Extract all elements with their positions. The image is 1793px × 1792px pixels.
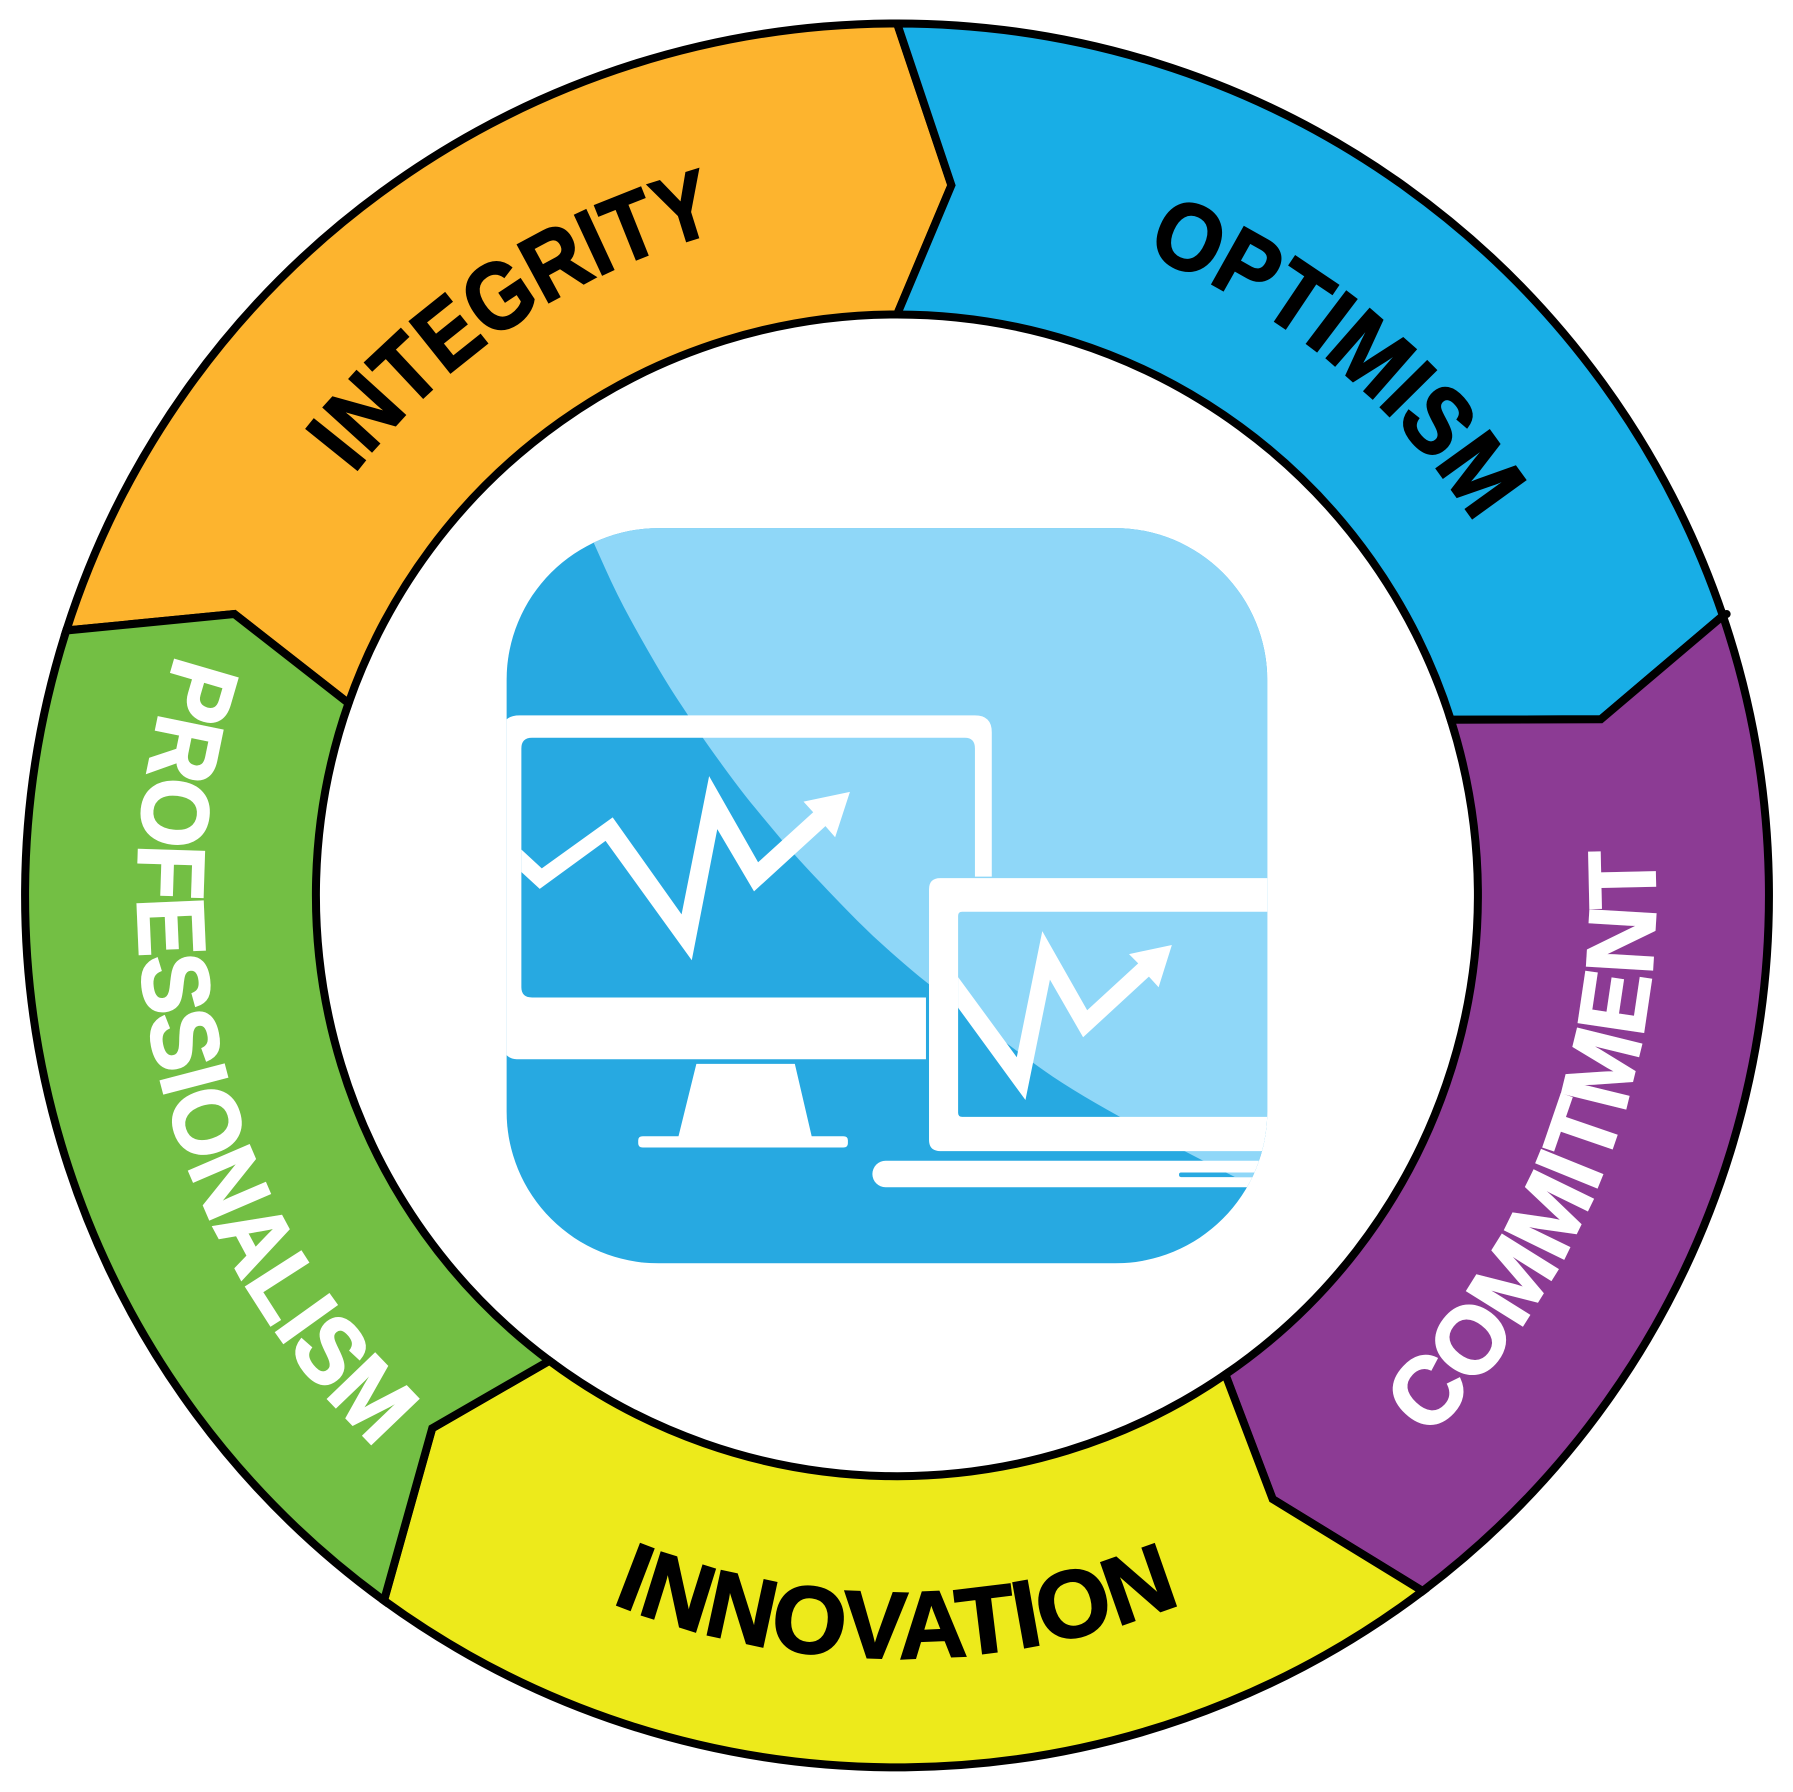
label: commitment: COMMITMENT bbox=[1392, 851, 1657, 1425]
label: professionalism: PROFESSIONALISM bbox=[136, 658, 420, 1446]
label: integrity: INTEGRITY bbox=[305, 168, 700, 472]
label: optimism: OPTIMISM bbox=[1156, 202, 1527, 520]
segment: integrity bbox=[60, 20, 948, 710]
label: innovation: INNOVATION bbox=[616, 1542, 1177, 1660]
icon: laptop bbox=[872, 878, 1296, 1187]
icon: laptop growth arrow bbox=[958, 931, 1172, 1100]
segment: optimism bbox=[894, 20, 1726, 724]
segment: commitment bbox=[1220, 609, 1773, 1596]
icon: monitor growth arrow bbox=[521, 776, 850, 960]
segment: professionalism bbox=[21, 610, 556, 1608]
segment: innovation bbox=[379, 1356, 1430, 1772]
icon: desktop monitor bbox=[507, 715, 992, 1147]
center icon: monitor and laptop with growth charts bbox=[507, 500, 1296, 1263]
